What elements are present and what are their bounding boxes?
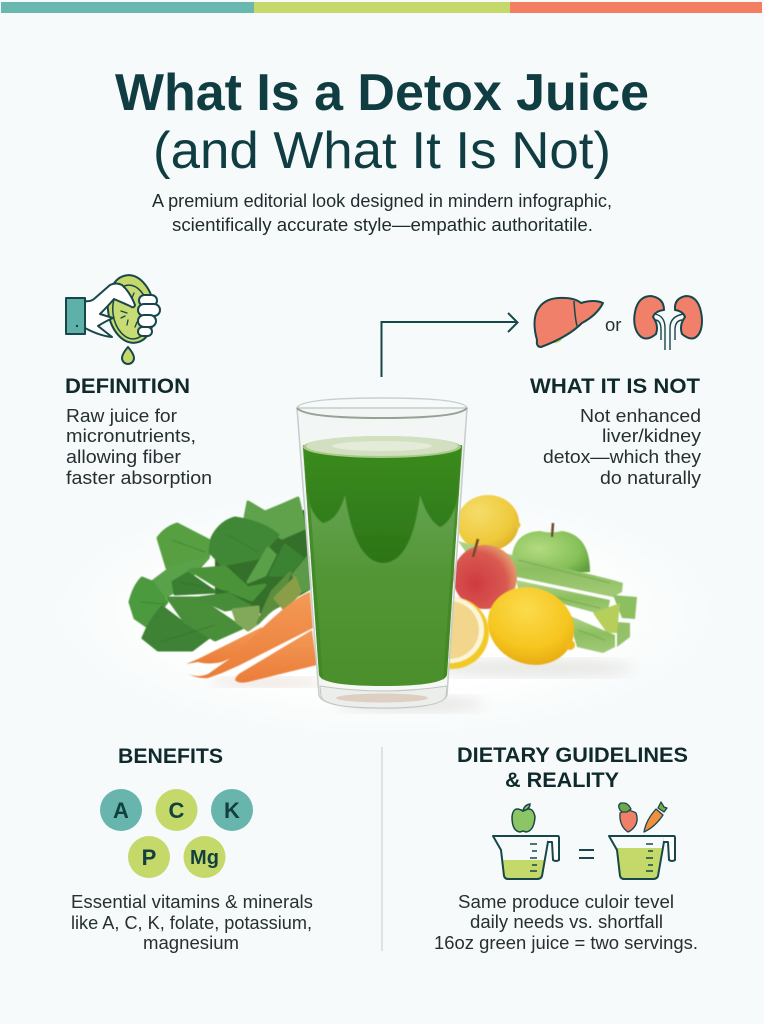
- glass base: [320, 686, 447, 708]
- title: [115, 64, 649, 180]
- nutrient badges: A: [113, 798, 129, 823]
- what it is not text: Not enhanced: [580, 405, 701, 426]
- heading: dietary guidelines: & REALITY: [505, 769, 619, 792]
- subtitle: scientifically accurate style—empathic authoritatile.: [172, 215, 593, 235]
- what it is not text: do naturally: [600, 467, 702, 488]
- top colour bar: [1, 2, 762, 13]
- dietary guidelines text: daily needs vs. shortfall: [470, 911, 663, 932]
- glass body: [297, 408, 467, 708]
- dietary guidelines text: Same produce culoir tevel: [458, 891, 674, 912]
- title: (and What It Is Not): [153, 122, 611, 180]
- definition text: [66, 405, 212, 488]
- icon: measuring cup left: [493, 836, 559, 879]
- benefits text: magnesium: [143, 932, 239, 953]
- nutrient badges: K: [224, 798, 240, 823]
- equals sign: [579, 850, 594, 858]
- icon: hand squeezing lime: [66, 272, 160, 364]
- heading: dietary guidelines: [457, 744, 688, 792]
- subtitle: A premium editorial look designed in mindern infographic,: [152, 191, 612, 211]
- green apple: [512, 523, 590, 575]
- juice reflections: [303, 446, 462, 563]
- benefits text: Essential vitamins & minerals: [71, 891, 313, 912]
- white backdrop glow behind produce: [45, 484, 725, 740]
- definition text: faster absorption: [66, 467, 212, 488]
- top lemon: [457, 495, 520, 551]
- red apple: [453, 539, 517, 609]
- dietary guidelines text: 16oz green juice = two servings.: [434, 932, 698, 953]
- definition text: Raw juice for: [66, 405, 177, 426]
- glass rim: [297, 398, 467, 418]
- carrots: [186, 592, 317, 683]
- spinach leaves: [130, 498, 310, 650]
- icon: beet and carrot above cup: [619, 802, 667, 832]
- juice foam: [303, 436, 461, 458]
- what it is not text: detox—which they: [543, 446, 702, 467]
- icon: kidneys: [634, 296, 702, 350]
- icon: liver: [534, 298, 603, 347]
- benefits text: [71, 891, 313, 953]
- nutrient badges: C: [169, 798, 185, 823]
- heading: benefits: BENEFITS: [118, 745, 223, 768]
- big lemon: [476, 574, 586, 678]
- icon: measuring cup right: [609, 836, 675, 879]
- lemon half: [415, 597, 489, 669]
- arrow: juice to what it is not: [382, 313, 518, 377]
- juice: [303, 445, 462, 686]
- title: What Is a Detox Juice: [115, 64, 649, 122]
- nutrient badges: Mg: [190, 847, 219, 869]
- heading: dietary guidelines: DIETARY GUIDELINES: [457, 744, 688, 767]
- label: or: or: [605, 314, 621, 335]
- definition text: micronutrients,: [66, 425, 196, 446]
- what it is not text: liver/kidney: [602, 425, 702, 446]
- icon: apple above cup: [512, 804, 535, 832]
- nutrient badges: P: [142, 845, 156, 870]
- heading: definition: DEFINITION: [65, 375, 190, 398]
- celery: [458, 541, 637, 653]
- hero: green juice with produce: [130, 398, 637, 712]
- subtitle: [152, 191, 612, 235]
- heading: what it is not: WHAT IT IS NOT: [530, 375, 700, 398]
- definition text: allowing fiber: [66, 446, 181, 467]
- glass of green juice: [297, 398, 467, 708]
- benefits text: like A, C, K, folate, potassium,: [71, 912, 312, 933]
- dietary guidelines text: [434, 891, 698, 953]
- nutrient badges: [100, 789, 253, 878]
- what it is not text: [543, 405, 702, 488]
